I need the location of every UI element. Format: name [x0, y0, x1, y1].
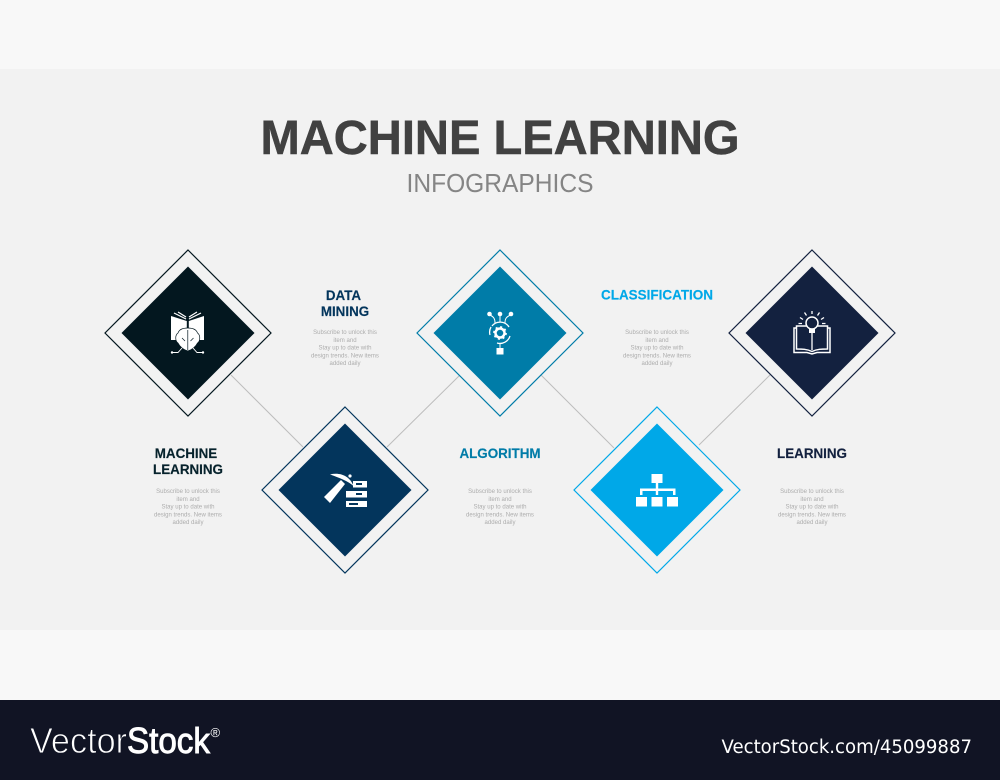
registered mark: ® [210, 725, 220, 740]
panel: classification [574, 407, 740, 573]
panel: algorithm [417, 250, 583, 416]
text block: classification: Stay up to date with [630, 346, 684, 352]
heading: algorithm: ALGORITHM [459, 446, 541, 461]
footer logo: Vector: Vector [30, 720, 127, 761]
icon: book with brain [171, 312, 204, 354]
heading: data mining: DATA [326, 288, 361, 303]
text block: learning: Subscribe to unlock this [780, 489, 844, 495]
text block: classification: added daily [642, 361, 673, 367]
diamond fill 4 [590, 424, 724, 556]
panel: learning [729, 250, 895, 416]
text block: classification: item and [645, 338, 669, 344]
footer id: VectorStock.com/45099887 [722, 737, 972, 758]
connector lines [231, 375, 770, 448]
text block: data mining: design trends. New items [311, 354, 379, 360]
icon: hierarchy [636, 474, 678, 506]
text block: machine learning: added daily [173, 520, 204, 526]
heading: machine learning: LEARNING [153, 462, 223, 477]
text block: machine learning: Stay up to date with [161, 504, 215, 510]
footer band [0, 700, 1000, 780]
text block: data mining: item and [333, 338, 357, 344]
text block: algorithm: Stay up to date with [473, 504, 527, 510]
text block: learning: design trends. New items [778, 512, 846, 518]
icon: pickaxe and server [324, 474, 367, 507]
icon: gear network [487, 312, 513, 354]
text block: learning: Stay up to date with [785, 504, 839, 510]
text block: learning: item and [800, 497, 824, 503]
text block: learning: added daily [797, 520, 828, 526]
title: MACHINE LEARNING [260, 111, 740, 165]
diamond outline 5 [729, 250, 895, 416]
text block: classification: design trends. New items [623, 354, 691, 360]
text block: data mining: added daily [330, 361, 361, 367]
diamond outline 1 [105, 250, 271, 416]
text block: classification: Subscribe to unlock this [625, 330, 689, 336]
heading: data mining: MINING [321, 304, 369, 319]
panel: data mining [262, 407, 428, 573]
footer logo: Stock: Stock [127, 720, 211, 761]
text block: algorithm: added daily [485, 520, 516, 526]
diamond fill 2 [278, 424, 412, 556]
text block: machine learning: Subscribe to unlock this [156, 489, 220, 495]
text block: data mining: Stay up to date with [318, 346, 372, 352]
text block: algorithm: design trends. New items [466, 512, 534, 518]
diamond fill 3 [434, 266, 566, 400]
panel: machine learning [105, 250, 271, 416]
icon: book with light bulb [794, 311, 830, 354]
heading: learning: LEARNING [777, 446, 847, 461]
text block: machine learning: design trends. New items [154, 512, 222, 518]
diamond outline 3 [417, 250, 583, 416]
text block: data mining: Subscribe to unlock this [313, 330, 377, 336]
text block: algorithm: Subscribe to unlock this [468, 489, 532, 495]
diamond outline 4 [574, 407, 740, 573]
diamond fill 5 [746, 266, 878, 400]
heading: machine learning: MACHINE [155, 446, 217, 461]
text block: algorithm: item and [488, 497, 512, 503]
subtitle: INFOGRAPHICS [406, 170, 594, 198]
diamond outline 2 [262, 407, 428, 573]
background panel [0, 69, 1000, 630]
text block: machine learning: item and [176, 497, 200, 503]
diamond fill 1 [122, 266, 254, 400]
heading: classification: CLASSIFICATION [601, 288, 713, 302]
